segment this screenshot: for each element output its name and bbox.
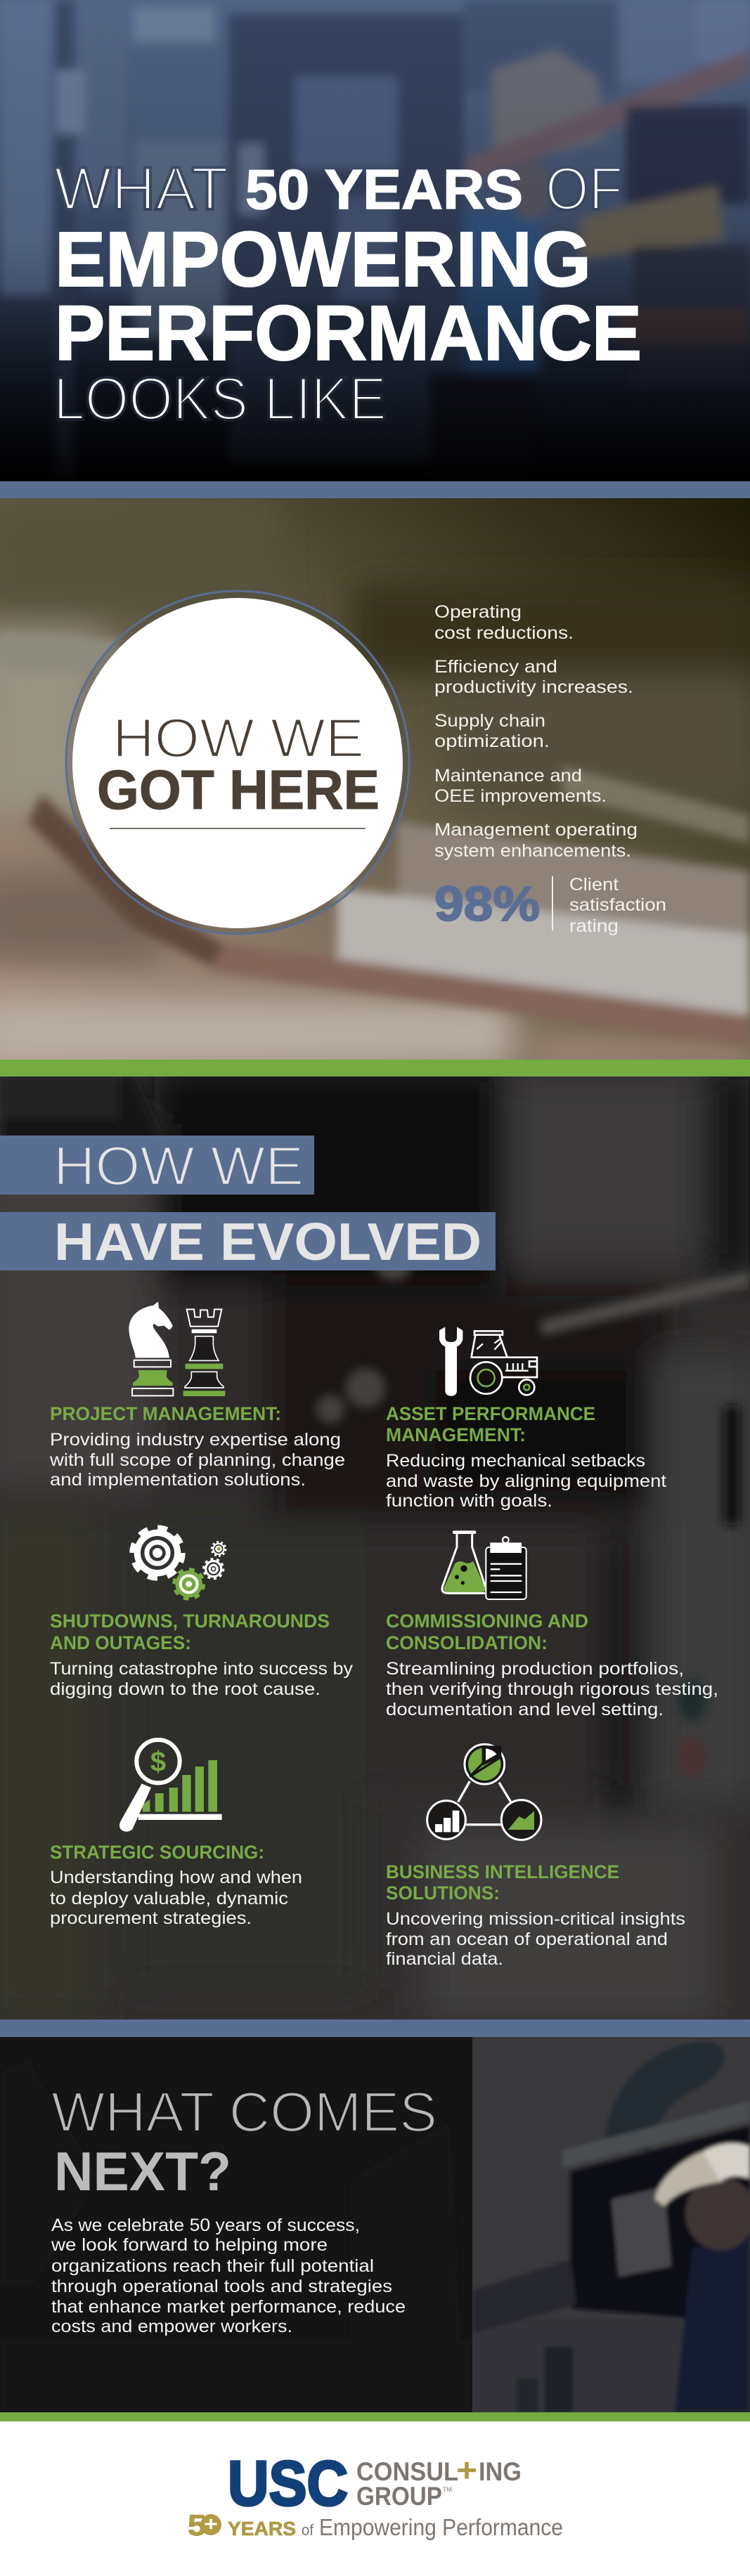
circle badge: [66, 591, 409, 934]
panel: hero title section: [0, 0, 750, 481]
item: shutdowns, turnarounds and outages: Turning catastrophe into success by: [50, 1659, 354, 1679]
title: EMPOWERING: [55, 216, 591, 303]
logo: USC Consulting Group: ING: [479, 2457, 522, 2486]
item: strategic sourcing: procurement strategies.: [50, 1908, 252, 1928]
heading: how we have evolved: HOW WE: [53, 1135, 304, 1197]
item: business intelligence solutions: from an ocean of operational and: [386, 1930, 668, 1949]
closing paragraph: we look forward to helping more: [51, 2235, 328, 2255]
benefits list: [434, 602, 638, 861]
panel: what comes next: [0, 2037, 750, 2412]
item: strategic sourcing: [50, 1740, 302, 1928]
stat: 98% client satisfaction: Client: [569, 875, 619, 895]
item: commissioning and consolidation: [386, 1530, 718, 1719]
tagline: 50 years of empowering performance: [188, 2509, 563, 2542]
title: 50 YEARS: [245, 158, 523, 221]
heading: how we have evolved: HAVE EVOLVED: [54, 1212, 481, 1271]
logo: USC Consulting Group: USC: [228, 2449, 348, 2519]
item: commissioning and consolidation: Streamlining production portfolios,: [386, 1659, 684, 1679]
logo: USC Consulting Group: GROUP: [356, 2482, 442, 2511]
closing paragraph: [51, 2216, 406, 2336]
panel: logo footer: [0, 2421, 750, 2576]
closing paragraph: As we celebrate 50 years of success,: [51, 2216, 360, 2235]
item: business intelligence solutions: Uncovering mission-critical insights: [386, 1909, 685, 1929]
item: asset performance management: [386, 1327, 666, 1511]
benefits list: system enhancements.: [434, 841, 631, 861]
item: commissioning and consolidation: documentation and level setting.: [386, 1700, 664, 1719]
item: commissioning and consolidation: COMMISSIONING AND: [386, 1611, 588, 1632]
logo: USC Consulting Group: +: [456, 2452, 477, 2488]
item: business intelligence solutions: BUSINESS INTELLIGENCE: [386, 1861, 619, 1882]
title: OF: [545, 155, 623, 223]
item: shutdowns, turnarounds and outages: [50, 1528, 354, 1699]
closing paragraph: organizations reach their full potential: [51, 2256, 374, 2276]
panel: how we got here: [0, 492, 750, 1068]
benefits list: OEE improvements.: [434, 786, 607, 806]
item: asset performance management: function with goals.: [386, 1491, 552, 1511]
icon: flask and clipboard: [442, 1530, 526, 1599]
closing paragraph: costs and empower workers.: [51, 2317, 292, 2336]
icon: gears: [132, 1528, 226, 1599]
hero background photo: warehouse worker: [0, 0, 750, 481]
benefits list: cost reductions.: [434, 623, 574, 643]
heading: how we have evolved: [0, 1135, 496, 1271]
stat: 98% client satisfaction: satisfaction: [569, 895, 666, 915]
closing paragraph: that enhance market performance, reduce: [51, 2297, 406, 2317]
benefits list: Maintenance and: [434, 766, 582, 786]
logo: USC Consulting Group: CONSUL: [356, 2457, 458, 2486]
faint background structure: [0, 2059, 472, 2412]
background photo: freight train: [0, 492, 750, 1068]
heading: what comes next: WHAT COMES: [51, 2081, 437, 2143]
item: commissioning and consolidation: then verifying through rigorous testing,: [386, 1679, 718, 1699]
item: shutdowns, turnarounds and outages: digging down to the root cause.: [50, 1679, 321, 1699]
panel: how we have evolved: [0, 1068, 750, 2024]
item: asset performance management: MANAGEMENT:: [386, 1424, 526, 1445]
benefits list: productivity increases.: [434, 677, 633, 697]
tagline: 50 years of empowering performance: +: [204, 2513, 218, 2535]
stat: 98% client satisfaction: 98%: [434, 876, 540, 931]
tagline: 50 years of empowering performance: 5: [188, 2509, 206, 2542]
item: business intelligence solutions: SOLUTIONS:: [386, 1882, 500, 1904]
icon: magnifier over bar chart: $: [150, 1747, 166, 1778]
item: project management: Providing industry expertise along: [50, 1430, 341, 1450]
heading: what comes next: [51, 2081, 437, 2202]
tagline: 50 years of empowering performance: YEARS: [228, 2518, 296, 2539]
background photo: technician at control panel: [0, 1068, 750, 2024]
item: shutdowns, turnarounds and outages: AND OUTAGES:: [50, 1632, 191, 1653]
icon: connected charts: [427, 1744, 541, 1840]
benefits list: Supply chain: [434, 711, 545, 731]
tagline: 50 years of empowering performance: Empowering Performance: [319, 2514, 563, 2540]
icon: wrench and tractor: [439, 1327, 537, 1396]
item: strategic sourcing: STRATEGIC SOURCING:: [50, 1842, 264, 1863]
item: strategic sourcing: Understanding how and when: [50, 1868, 302, 1887]
divider bar: blue: [0, 2019, 750, 2037]
stat: 98% client satisfaction: [434, 875, 666, 936]
item: asset performance management: Reducing mechanical setbacks: [386, 1451, 645, 1471]
heading: what comes next: NEXT?: [54, 2140, 231, 2202]
item: commissioning and consolidation: CONSOLIDATION:: [386, 1632, 548, 1653]
benefits list: Management operating: [434, 820, 638, 840]
item: project management: PROJECT MANAGEMENT:: [50, 1403, 281, 1424]
logo: USC Consulting Group: [228, 2449, 522, 2519]
divider bar: green: [0, 1060, 750, 1076]
logo: USC Consulting Group: TM: [443, 2486, 452, 2493]
stat: 98% client satisfaction: rating: [569, 916, 619, 936]
benefits list: Operating: [434, 602, 522, 622]
title: WHAT: [54, 155, 228, 223]
circle badge: GOT HERE: [97, 758, 380, 821]
item: asset performance management: and waste by aligning equipment: [386, 1471, 666, 1491]
tagline: 50 years of empowering performance: of: [302, 2521, 314, 2539]
item: project management: and implementation solutions.: [50, 1470, 306, 1490]
divider bar: green: [0, 2412, 750, 2421]
item: asset performance management: ASSET PERFORMANCE: [386, 1403, 595, 1424]
item: project management: [49, 1301, 345, 1490]
item: project management: with full scope of planning, change: [49, 1450, 345, 1470]
item: business intelligence solutions: financial data.: [386, 1949, 503, 1969]
benefits list: Efficiency and: [434, 657, 557, 677]
divider bar: blue: [0, 481, 750, 498]
closing paragraph: through operational tools and strategies: [51, 2277, 392, 2296]
benefits list: optimization.: [434, 731, 550, 751]
circle badge: HOW WE: [112, 707, 364, 769]
background photo: plant worker with hard hat: [472, 2037, 750, 2412]
item: business intelligence solutions: [386, 1744, 685, 1969]
icon: chess knight and rook: [129, 1301, 225, 1396]
title: PERFORMANCE: [55, 290, 642, 377]
title: LOOKS LIKE: [53, 365, 387, 433]
title: [53, 155, 642, 433]
icon: magnifier over bar chart: [119, 1740, 222, 1832]
item: shutdowns, turnarounds and outages: SHUTDOWNS, TURNAROUNDS: [50, 1611, 330, 1632]
item: strategic sourcing: to deploy valuable, dynamic: [50, 1889, 288, 1908]
dark text panel: [0, 2037, 472, 2412]
